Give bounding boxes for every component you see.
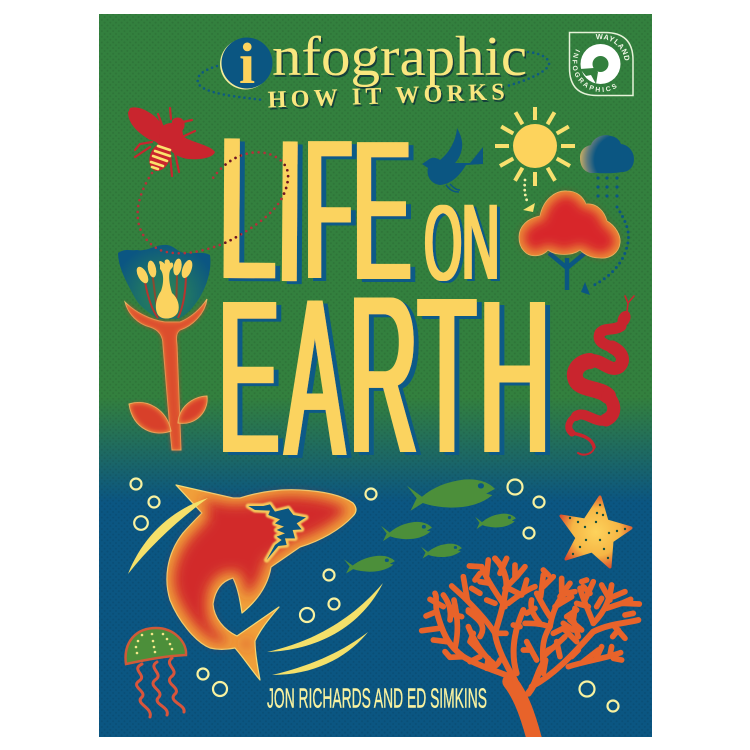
snake [569,296,634,455]
small fish 4 [344,556,395,573]
shark teeth mouth [248,504,306,560]
title word: EARTH: A [286,253,344,504]
wordmark: nfographic [272,26,527,88]
bee flight path dotted [138,152,288,253]
bee striped abdomen [145,140,175,174]
series logo: Infographic How It Works [198,26,549,113]
i badge: i [239,31,255,96]
title word: EARTH: H [479,255,550,498]
Wayland Infographics publisher logo: WAYLAND [596,34,630,60]
Wayland Infographics publisher logo: INFOGRAPHICS [572,49,617,92]
bee [128,107,215,176]
fish school [344,479,516,573]
large fish [407,479,495,511]
title word: LIFE: L [218,95,277,322]
title word: LIFE: E [353,99,411,322]
dotted logo swoosh [198,52,549,100]
book cover background [99,14,652,737]
jellyfish tentacles [137,658,184,717]
jellyfish [126,628,186,717]
flower leaf left [129,402,171,433]
rain cloud [580,135,634,173]
title word: EARTH: T [418,252,476,500]
jellyfish spots [135,633,173,654]
i badge [220,31,272,96]
starfish spots [569,504,626,559]
title word: LIFE [218,95,411,325]
coral [422,558,639,742]
rain and water arrow to tree [581,178,628,295]
title: Life on Earth [218,95,550,504]
bubbles [130,478,618,712]
flower [118,245,210,450]
subtitle: HOW IT WORKS [267,79,505,113]
swoosh lines [128,498,383,675]
shark body [167,485,356,680]
title word: EARTH [219,249,550,504]
tree trunk [549,253,585,290]
bee wings and body [128,107,215,159]
bird [422,128,483,192]
bee legs and antennae [135,108,195,176]
jellyfish dome [126,628,186,664]
title word: ON: O [424,182,462,303]
starfish [561,497,631,567]
flower pistil [156,259,179,319]
title word: ON [424,182,500,303]
flower leaf right [178,396,207,423]
title word: ON: N [462,182,500,303]
small fish 3 [421,544,462,559]
title word: EARTH: R [349,249,418,500]
flower stamens [134,258,194,318]
small fish 1 [475,514,516,529]
title word: LIFE: I [276,97,304,325]
flower petal cup [118,245,210,319]
title word: EARTH: E [219,256,279,499]
title word: LIFE: F [305,97,352,320]
text: JON RICHARDS AND ED SIMKINS [267,682,487,714]
shark [167,485,356,680]
tree crown [519,191,620,258]
small fish 2 [381,522,432,541]
arrow: sun to tree [523,180,535,212]
Wayland Infographics publisher logo [568,32,634,96]
tree [519,191,620,290]
sun [495,107,575,186]
flower stem and sepals [125,299,207,450]
sun rays [495,107,575,186]
